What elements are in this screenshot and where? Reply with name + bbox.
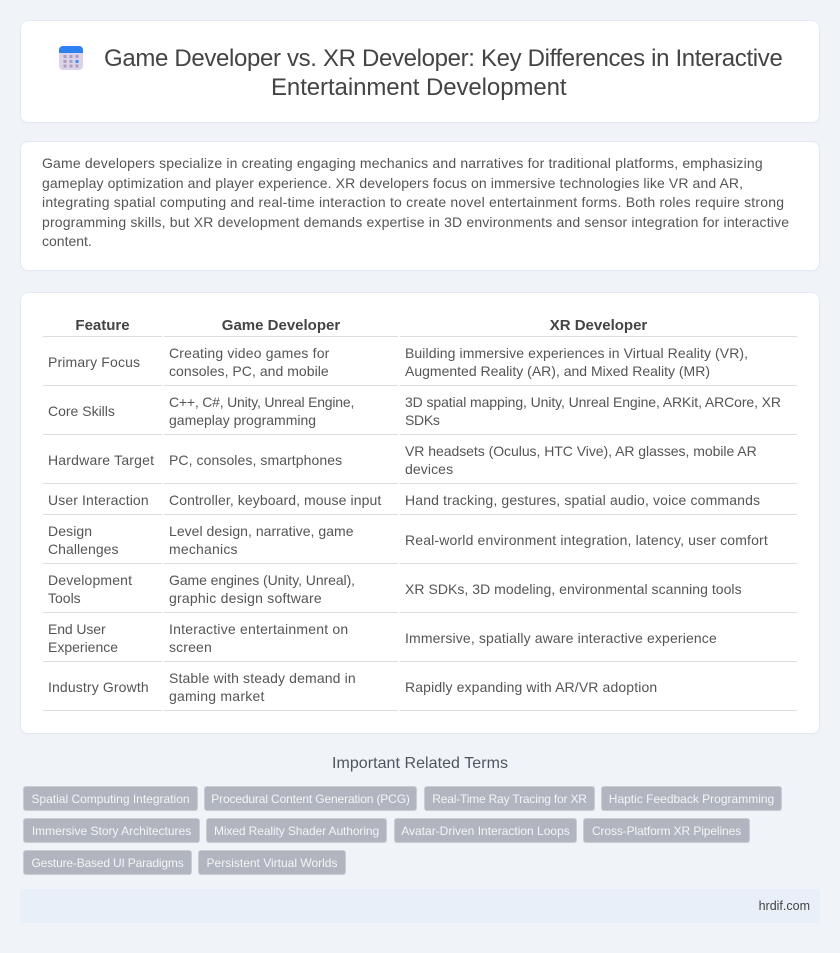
tag [583,818,750,843]
row: End User Experience [43,621,797,662]
row: Core Skills: C++, C#, Unity, Unreal Engine, [169,394,354,410]
table header: Game Developer [222,317,340,334]
row: End User Experience: Interactive entertainment on [169,621,348,637]
tag [601,786,782,811]
row: Design Challenges [43,523,797,564]
table header: XR Developer [550,317,647,334]
tag [23,850,192,875]
tag: Gesture-Based UI Paradigms [31,856,184,870]
row: Design Challenges: mechanics [169,541,238,557]
row: Design Challenges: Challenges [48,541,119,557]
icon: calendar grid [59,46,83,70]
row: Hardware Target: devices [405,461,453,477]
row: Industry Growth: gaming market [169,688,265,704]
row: Development Tools: Tools [48,590,81,606]
row: User Interaction: Controller, keyboard, mouse input [169,492,381,508]
row: User Interaction: User Interaction [48,492,149,508]
row: Core Skills: Core Skills [48,403,115,419]
row: Core Skills [43,394,797,435]
footer bar [20,889,820,923]
row: End User Experience: End User [48,621,106,637]
row: Development Tools: Development [48,572,132,588]
row: Industry Growth: Industry Growth [48,679,149,695]
row: Industry Growth [43,670,797,711]
header card [20,20,820,123]
row: Core Skills: gameplay programming [169,412,316,428]
tag [204,786,417,811]
row: End User Experience: Immersive, spatially aware interactive experience [405,630,717,646]
tag [23,786,198,811]
row: Development Tools: XR SDKs, 3D modeling, environmental scanning tools [405,581,742,597]
title [104,45,782,101]
row: Hardware Target: VR headsets (Oculus, HTC Vive), AR glasses, mobile AR [405,443,757,459]
row: Core Skills: SDKs [405,412,440,428]
row: Industry Growth: Stable with steady demand in [169,670,356,686]
row: Design Challenges: Design [48,523,92,539]
description text: Game developers specialize in creating engaging mechanics and narratives for traditional platforms, emphasizing [42,155,763,171]
row: Hardware Target [43,443,797,484]
row: Hardware Target: Hardware Target [48,452,154,468]
row: End User Experience: screen [169,639,212,655]
tag [394,818,577,843]
tag: Procedural Content Generation (PCG) [211,792,410,806]
row: Primary Focus: Building immersive experiences in Virtual Reality (VR), [405,345,748,361]
tag: Spatial Computing Integration [31,792,190,806]
panel: description [20,141,820,271]
tag: Persistent Virtual Worlds [207,856,337,870]
row: User Interaction: Hand tracking, gestures, spatial audio, voice commands [405,492,760,508]
row: Industry Growth: Rapidly expanding with AR/VR adoption [405,679,657,695]
heading: Important Related Terms: Important Related Terms [332,755,508,772]
description text: gameplay optimization and player experience. XR developers focus on immersive technologies like VR and AR, [42,174,743,190]
description text: programming skills, but XR development demands expertise in 3D environments and sensor integration for interactive [42,214,789,230]
row: Primary Focus: consoles, PC, and mobile [169,363,329,379]
tag: Real-Time Ray Tracing for XR [432,792,587,806]
row: Design Challenges: Real-world environment integration, latency, user comfort [405,532,768,548]
row: Primary Focus: Creating video games for [169,345,330,361]
row: Primary Focus: Primary Focus [48,354,140,370]
row: Hardware Target: PC, consoles, smartphones [169,452,342,468]
description text: content. [42,233,92,249]
title: Game Developer vs. XR Developer: Key Differences in Interactive [104,45,782,72]
panel: comparison table [20,292,820,734]
row: Development Tools [43,572,797,613]
tag [206,818,387,843]
tag: Cross-Platform XR Pipelines [592,824,741,838]
description text [42,155,789,249]
row: Development Tools: Game engines (Unity, Unreal), [169,572,355,588]
description text: integrating spatial computing and real-time interaction to create novel entertainment forms. Both roles require strong [42,194,784,210]
tag [424,786,595,811]
row: Core Skills: 3D spatial mapping, Unity, Unreal Engine, ARKit, ARCore, XR [405,394,781,410]
row: Primary Focus [43,345,797,386]
related term tags [23,786,782,875]
row: User Interaction [43,492,797,515]
tag [198,850,346,875]
tag: Immersive Story Architectures [32,824,191,838]
tag: Mixed Reality Shader Authoring [214,824,379,838]
row: Primary Focus: Augmented Reality (AR), and Mixed Reality (MR) [405,363,710,379]
tag: Avatar-Driven Interaction Loops [401,824,570,838]
title: Entertainment Development [271,74,566,101]
table header: Feature [75,317,130,334]
row: Design Challenges: Level design, narrative, game [169,523,354,539]
comparison table [43,317,797,711]
footer source: hrdif.com [759,899,810,913]
row: End User Experience: Experience [48,639,118,655]
row: Development Tools: graphic design software [169,590,322,606]
table header [43,317,797,337]
tag [23,818,200,843]
tag: Haptic Feedback Programming [609,792,774,806]
